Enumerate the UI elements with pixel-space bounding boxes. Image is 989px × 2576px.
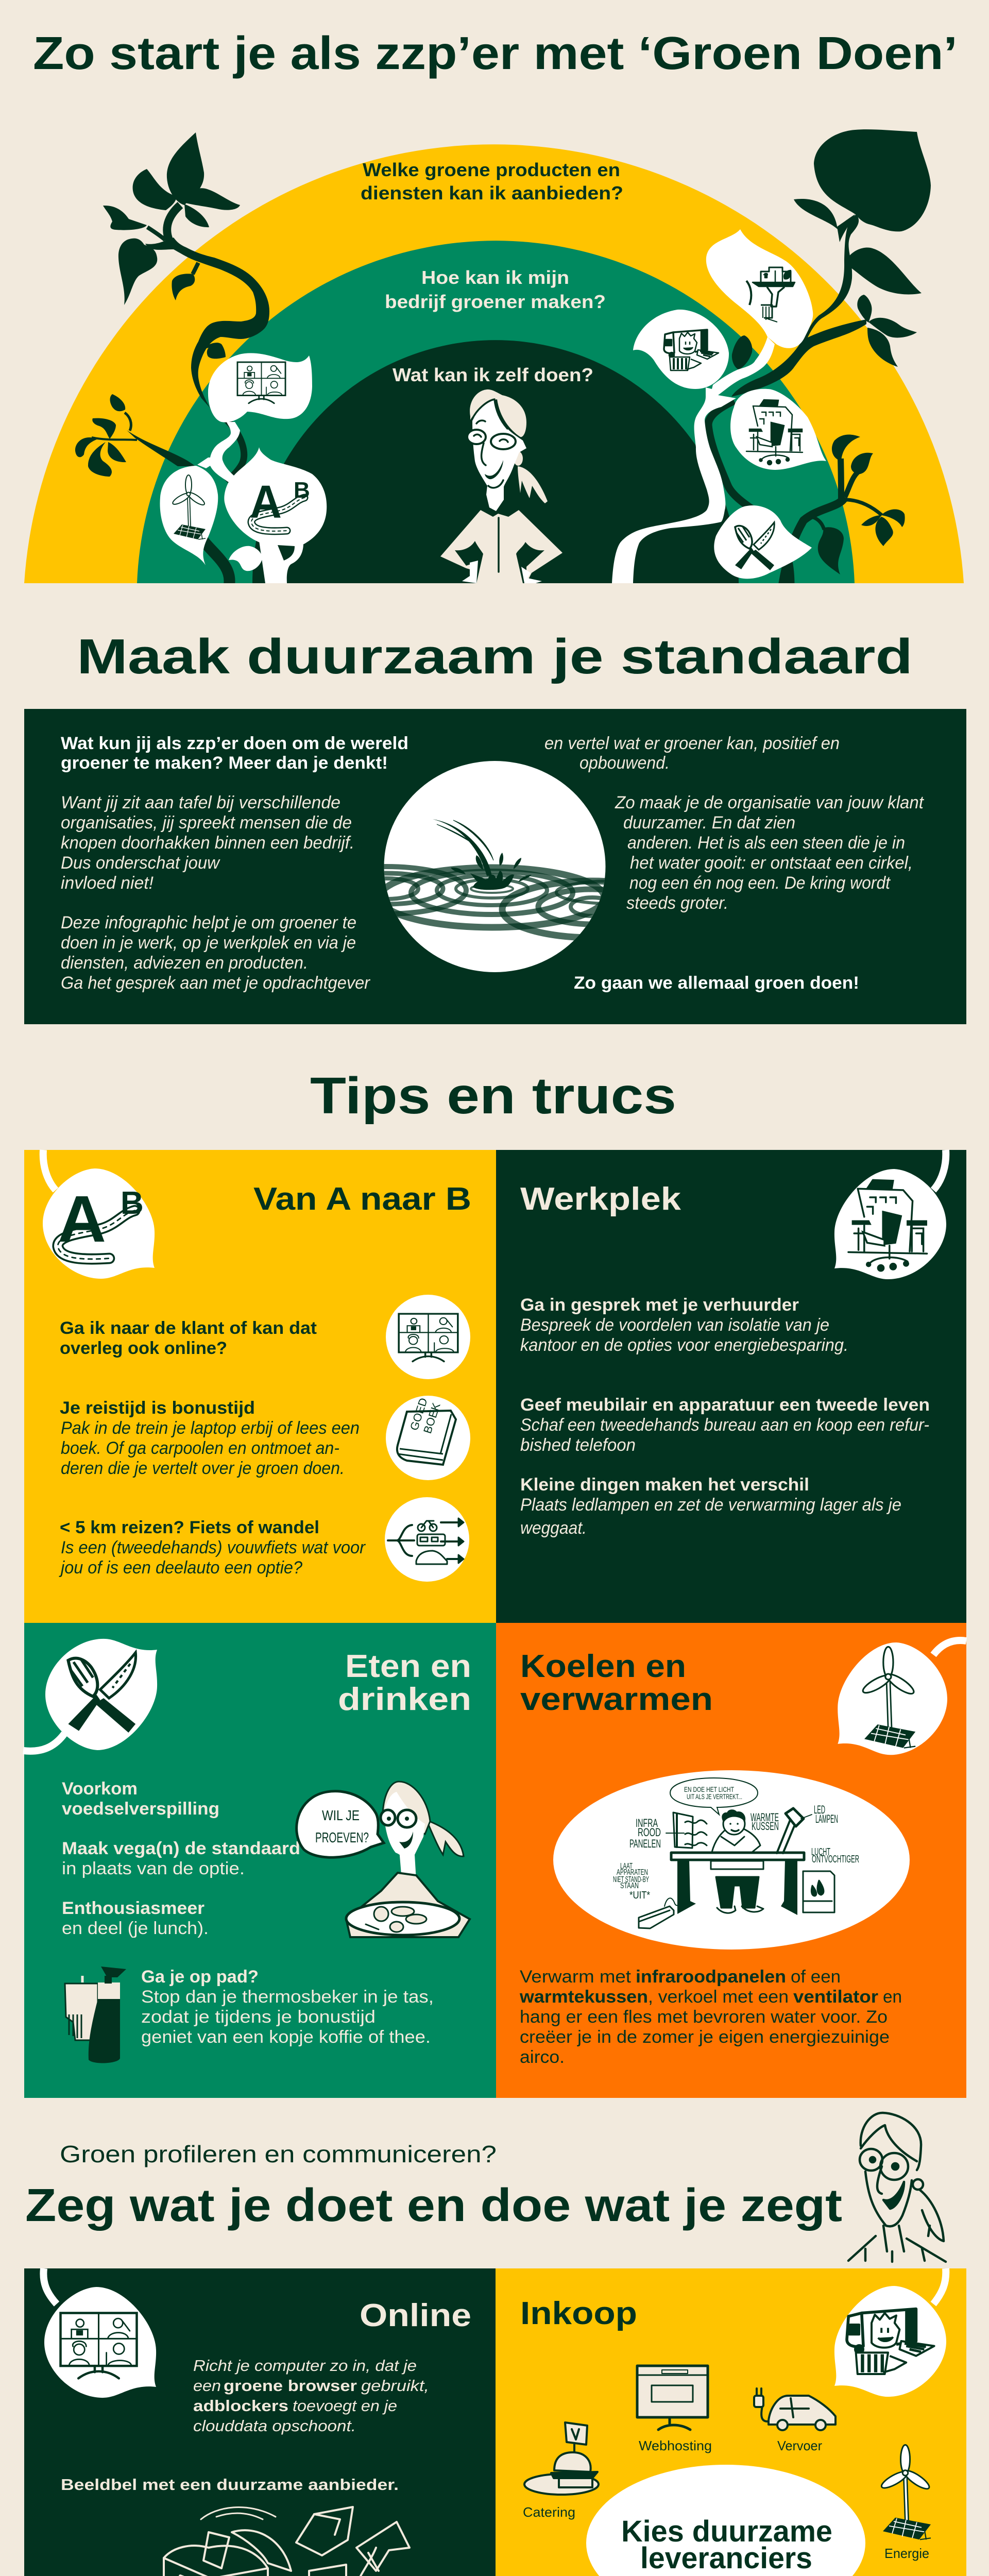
- illustration: desk with heating tips: ROOD: [638, 1826, 661, 1839]
- text block: intro left: Ga het gesprek aan met je opdrachtgever: [61, 973, 371, 993]
- speech bubble: EN DOE HET LICHT: [684, 1785, 734, 1793]
- speech bubble: [670, 1778, 758, 1815]
- illustration: desk with heating tips: NIET STAND-BY: [613, 1875, 649, 1884]
- illustration: desk with heating tips: APPARATEN: [617, 1868, 648, 1877]
- vine left: dark leaves: [103, 132, 269, 408]
- tip: kleine dingen: [520, 1475, 901, 1538]
- icon: video call: [61, 2313, 137, 2378]
- text block: intro left: organisaties, jij spreekt mensen die de: [61, 813, 352, 833]
- illustration: desk with heating tips: INFRA: [636, 1817, 658, 1829]
- tip: verhuurder: [520, 1295, 848, 1355]
- panel: Online: [24, 2268, 496, 2576]
- tip: verhuurder: kantoor en de opties voor energiebesparing.: [520, 1335, 848, 1355]
- heading: Tips en trucs: Tips en trucs: [310, 1067, 676, 1125]
- panel: Inkoop: [496, 2268, 966, 2576]
- tips: eten: in plaats van de optie.: [62, 1859, 245, 1878]
- tip: fietsen: jou of is een deelauto een optie?: [59, 1558, 302, 1578]
- icon: route A to B leaf: B: [294, 478, 310, 503]
- tip: bonustijd: Pak in de trein je laptop erbij of lees een: [61, 1418, 360, 1438]
- text block: browser: groene browser: [224, 2377, 357, 2395]
- text block: koelen: en: [883, 1987, 902, 2007]
- tips: eten: [62, 1779, 300, 1938]
- text block: koelen: , verkoel met een: [648, 1987, 789, 2007]
- illustration: desk with heating tips: *UIT*: [629, 1890, 650, 1901]
- illustration: stone in water: [306, 761, 683, 972]
- tip: verhuurder: Bespreek de voordelen van isolatie van je: [520, 1315, 829, 1335]
- text block: koelen: Verwarm met: [520, 1967, 632, 1987]
- panel: Van A naar B: [24, 1150, 496, 1623]
- heading: Werkplek: [520, 1181, 681, 1217]
- illustration: desk with heating tips: LAAT: [620, 1862, 633, 1871]
- tip: op pad: Stop dan je thermosbeker in je tas,: [141, 1987, 434, 2007]
- text block: koelen: hang er een fles met bevroren water voor. Zo: [520, 2007, 888, 2027]
- text block: intro right: het water gooit: er ontstaat een cirkel,: [630, 853, 913, 873]
- heading: [520, 1649, 713, 1717]
- callout: kies duurzame leveranciers: leveranciers: [640, 2541, 812, 2575]
- text block: browser: Richt je computer zo in, dat je: [193, 2357, 417, 2375]
- icon: fork and knife: [68, 1653, 136, 1733]
- panel: Koelen en verwarmen: [496, 1623, 966, 2098]
- icon: route A to B: [58, 1182, 144, 1259]
- illustration: woman outline: [848, 2113, 946, 2262]
- tip: tweede leven: Geef meubilair en apparatuur een tweede leven: [520, 1395, 930, 1415]
- icon: vervoer: [754, 2388, 835, 2453]
- illustration: desk with heating tips: KUSSEN: [752, 1820, 779, 1833]
- question: middle arch: [385, 267, 606, 312]
- heading: Inkoop: [520, 2296, 637, 2331]
- tip: tweede leven: [520, 1395, 930, 1455]
- white stems and leaves right: [612, 229, 826, 583]
- illustration: desk with heating tips: LAMPEN: [815, 1812, 838, 1825]
- tips: eten: en deel (je lunch).: [62, 1919, 209, 1938]
- heading: Van A naar B: [253, 1181, 471, 1217]
- text block: browser: clouddata opschoont.: [193, 2417, 356, 2435]
- arch: dark: [252, 340, 739, 583]
- text block: intro right: Zo gaan we allemaal groen doen!: [574, 973, 859, 993]
- icon: webhosting: Webhosting: [639, 2438, 712, 2453]
- tip: fietsen: Is een (tweedehands) vouwfiets wat voor: [61, 1538, 366, 1557]
- illustration: desk with heating tips: [553, 1770, 910, 1950]
- heading: Maak duurzaam je standaard: Maak duurzaam je standaard: [77, 629, 913, 684]
- text block: intro left: Want jij zit aan tafel bij verschillende: [61, 793, 340, 812]
- illustration: woman with lunch plate: WIL JE: [322, 1807, 360, 1823]
- tip: tweede leven: Schaf een tweedehands bureau aan en koop een refur-: [520, 1415, 929, 1435]
- question: middle arch: bedrijf groener maken?: [385, 291, 606, 312]
- text block: koelen: ventilator: [793, 1987, 878, 2007]
- text block: intro right: Zo maak je de organisatie van jouw klant: [615, 793, 925, 812]
- tip: op pad: zodat je tijdens je bonustijd: [141, 2007, 376, 2027]
- illustration: desk with heating tips: LUCHT: [811, 1846, 830, 1858]
- icon: delivery person: [847, 2309, 934, 2374]
- text block: browser: adblockers: [193, 2397, 288, 2415]
- subheading: groen profileren: Groen profileren en communiceren?: [60, 2141, 497, 2167]
- text block: intro left: Deze infographic helpt je om groener te: [61, 913, 356, 933]
- text block: koelen: creëer je in de zomer je eigen energiezuinige: [520, 2027, 890, 2047]
- hero: nested arches with vine and woman: [24, 129, 964, 585]
- heading: Koelen en: [520, 1649, 686, 1684]
- icon: catering: Catering: [523, 2504, 575, 2520]
- text block: intro left: Dus onderschat jouw: [61, 853, 220, 873]
- question: outer arch: [362, 163, 622, 200]
- woman in centre: [440, 389, 562, 583]
- icon: book circle: GOED: [407, 1396, 430, 1432]
- icon: waiter with tray leaf: [746, 267, 795, 322]
- icon: video call circle: [386, 1295, 470, 1379]
- text block: intro right: nog een én nog een. De kring wordt: [629, 873, 891, 893]
- tips: eten: Voorkom: [62, 1779, 138, 1799]
- text block: intro right: anderen. Het is als een steen die je in: [627, 833, 905, 853]
- text block: intro left: doen in je werk, op je werkplek en via je: [61, 933, 356, 953]
- panel: intro: [24, 709, 966, 1024]
- tip: tweede leven: bished telefoon: [520, 1435, 636, 1455]
- tip: fietsen: < 5 km reizen? Fiets of wandel: [60, 1518, 319, 1537]
- text block: browser: gebruikt,: [361, 2377, 429, 2395]
- tip: online: [60, 1318, 317, 1358]
- text block: koelen: [519, 1967, 902, 2067]
- icon: route A to B: B: [121, 1185, 144, 1221]
- text block: browser: toevoegt en je: [293, 2397, 397, 2415]
- tip: op pad: geniet van een kopje koffie of thee.: [141, 2027, 431, 2047]
- question: inner arch: Wat kan ik zelf doen?: [393, 364, 593, 385]
- icon: route A to B leaf: [250, 477, 310, 531]
- text block: intro left: [61, 734, 408, 993]
- illustration: woman with lunch plate: [297, 1782, 470, 1937]
- icon: travel choices circle: [385, 1497, 469, 1582]
- tips: eten: Maak vega(n) de standaard: [62, 1839, 300, 1858]
- heading: Eten en: [345, 1649, 471, 1684]
- vine lower right: dark leaves: [818, 435, 905, 574]
- text block: intro right: steeds groter.: [626, 893, 728, 913]
- text block: koelen: warmtekussen: [519, 1987, 648, 2007]
- callout: kies duurzame leveranciers: Kies duurzame: [621, 2515, 832, 2548]
- icon: video call leaf: [237, 362, 285, 403]
- heading: Zeg wat je doet: Zeg wat je doet en doe wat je zegt: [25, 2180, 842, 2231]
- text block: browser: een: [193, 2377, 221, 2395]
- panel: Eten en drinken: [23, 1623, 496, 2098]
- white stems and leaves left: [160, 353, 327, 583]
- title: Zo start je als zzp’er met ‘Groen Doen’: [33, 28, 958, 79]
- icon: fork and knife leaf: [735, 522, 774, 570]
- heading: [338, 1649, 471, 1717]
- text: beeldbel: Beeldbel met een duurzame aanbieder.: [61, 2476, 399, 2494]
- illustration: printer with flying paper: [120, 2507, 410, 2576]
- tip: kleine dingen: weggaat.: [520, 1518, 587, 1538]
- text block: intro right: duurzamer. En dat zien: [623, 813, 795, 833]
- question: outer arch: diensten kan ik aanbieden?: [361, 182, 623, 204]
- text block: intro left: diensten, adviezen en producten.: [61, 953, 308, 973]
- tip: op pad: [141, 1967, 434, 2047]
- arch: green: [137, 241, 855, 583]
- vine lower left: sprig: [75, 394, 195, 477]
- icon: office building leaf: [746, 400, 803, 465]
- icon: route A to B leaf: A: [250, 477, 282, 528]
- text block: koelen: airco.: [520, 2047, 565, 2067]
- icon: vervoer: Vervoer: [777, 2438, 822, 2453]
- text block: intro left: Wat kun jij als zzp’er doen om de wereld: [61, 734, 408, 753]
- tips: eten: Enthousiasmeer: [62, 1899, 204, 1918]
- illustration: woman with lunch plate: PROEVEN?: [315, 1829, 369, 1845]
- text block: intro right: en vertel wat er groener kan, positief en: [544, 734, 840, 753]
- text block: intro right: opbouwend.: [579, 753, 670, 773]
- illustration: desk with heating tips: WARMTE: [751, 1811, 779, 1824]
- icon: energie: Energie: [884, 2546, 929, 2561]
- tips: eten: voedselverspilling: [62, 1799, 219, 1819]
- icon: delivery person leaf: [664, 330, 719, 370]
- icon: book circle: BOEK: [421, 1401, 443, 1435]
- callout: kies duurzame leveranciers: [586, 2465, 865, 2576]
- tip: kleine dingen: Plaats ledlampen en zet de verwarming lager als je: [520, 1495, 901, 1515]
- icon: office building: [848, 1180, 927, 1271]
- illustration: desk with heating tips: ONTVOCHTIGER: [812, 1854, 859, 1865]
- tip: verhuurder: Ga in gesprek met je verhuurder: [520, 1295, 799, 1315]
- icon: wind and solar: [861, 1647, 916, 1748]
- text block: intro left: knopen doorhakken binnen een bedrijf.: [61, 833, 354, 853]
- arch: yellow: [24, 144, 964, 583]
- illustration: desk with heating tips: LED: [814, 1803, 825, 1816]
- illustration: desk with heating tips: STAAN: [620, 1882, 639, 1890]
- text block: intro right: [544, 734, 925, 993]
- icon: book circle: [386, 1396, 470, 1480]
- tip: bonustijd: [60, 1398, 360, 1478]
- heading: drinken: [338, 1682, 471, 1717]
- icon: catering: [523, 2422, 599, 2520]
- tip: online: overleg ook online?: [60, 1338, 227, 1358]
- question: outer arch: Welke groene producten en: [363, 159, 620, 180]
- icon: energie: [879, 2445, 932, 2561]
- tip: online: Ga ik naar de klant of kan dat: [60, 1318, 317, 1338]
- tip: bonustijd: deren die je vertelt over je groen doen.: [61, 1459, 345, 1478]
- tip: kleine dingen: Kleine dingen maken het verschil: [520, 1475, 809, 1495]
- vine right: dark leaves and stems: [731, 129, 931, 397]
- text block: intro left: groener te maken? Meer dan je denkt!: [61, 753, 388, 773]
- icon: thermos and cup: [65, 1967, 126, 2063]
- text block: browser: [193, 2357, 429, 2435]
- icon: route A to B: A: [58, 1182, 106, 1256]
- vine left: stems: [147, 205, 244, 585]
- tip: bonustijd: boek. Of ga carpoolen en ontmoet an-: [61, 1438, 339, 1458]
- panel: Werkplek: [496, 1150, 966, 1623]
- text block: koelen: of een: [791, 1967, 841, 1987]
- heading: Online: [360, 2298, 471, 2333]
- icon: wind and solar leaf: [172, 475, 206, 539]
- tip: op pad: Ga je op pad?: [141, 1967, 259, 1987]
- icon: webhosting: [637, 2366, 712, 2453]
- illustration: desk with heating tips: PANELEN: [629, 1837, 661, 1850]
- question: middle arch: Hoe kan ik mijn: [421, 267, 569, 288]
- tip: bonustijd: Je reistijd is bonustijd: [60, 1398, 255, 1418]
- text block: intro left: invloed niet!: [61, 873, 154, 893]
- speech bubble: UIT ALS JE VERTREKT...: [687, 1792, 742, 1801]
- tip: fietsen: [59, 1518, 366, 1578]
- heading: verwarmen: [520, 1682, 713, 1717]
- text block: koelen: infraroodpanelen: [636, 1967, 786, 1987]
